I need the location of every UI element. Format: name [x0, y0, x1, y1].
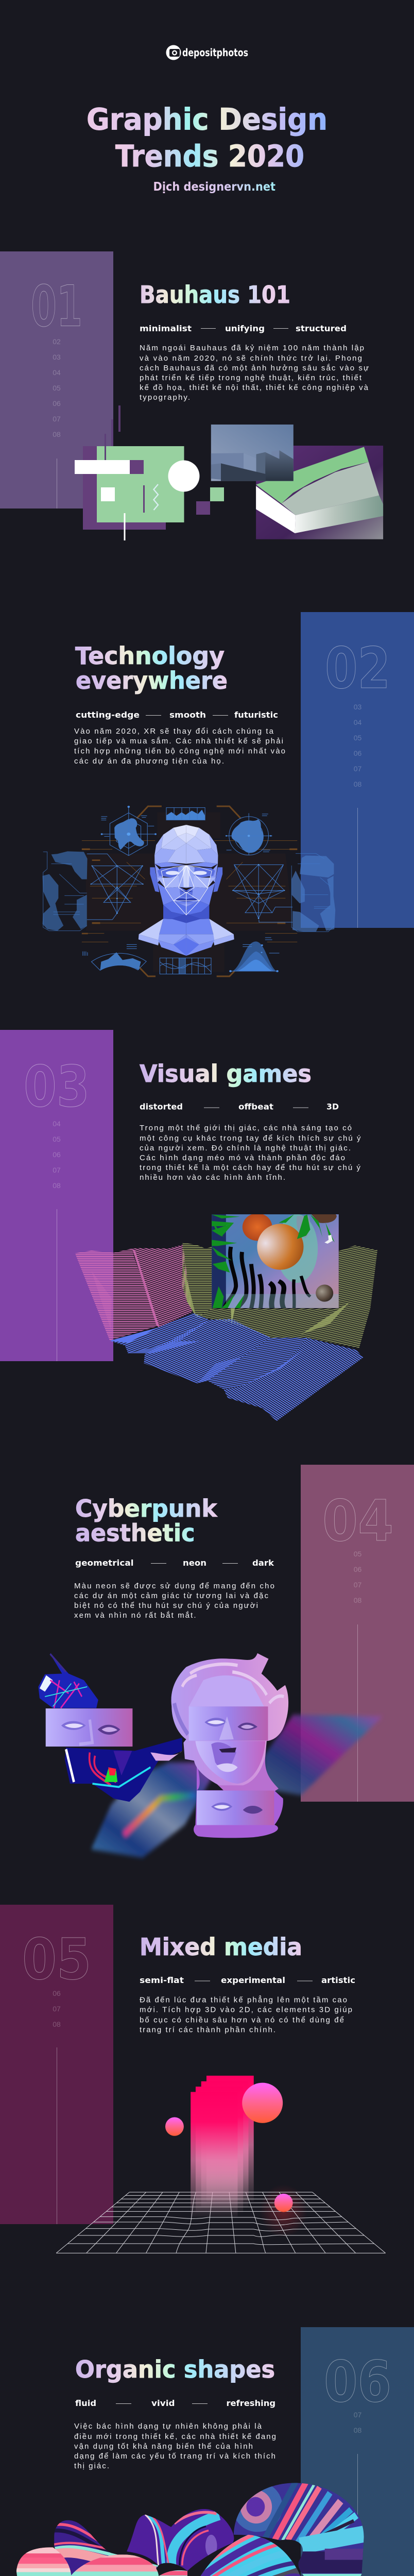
section 03 body text: nhiều hơn vào các hình ảnh tĩnh.	[140, 1173, 285, 1182]
HUD backdrop	[82, 806, 297, 976]
chapter index list: 07	[354, 765, 361, 773]
section 05 heading: Mixed media	[140, 1933, 302, 1961]
section 05 body text: Đã đến lúc đưa thiết kế phẳng lên một tầm cao	[140, 1995, 347, 2004]
illustration: organic striped blob	[16, 2483, 364, 2576]
section 06 body text: điều mới trong thiết kế, các nhà thiết kế đang	[74, 2432, 276, 2441]
HUD wire networks	[87, 854, 292, 922]
section number 04: 04	[322, 1488, 393, 1554]
eye slice lower	[197, 1791, 274, 1825]
chapter index list: 07	[53, 1166, 61, 1174]
section 06 body text: vận dụng tốt khả năng biến thể của hình	[74, 2442, 253, 2451]
chapter index list: 04	[354, 718, 361, 726]
chapter index list	[53, 1989, 61, 2028]
section 06 keywords	[75, 2398, 275, 2408]
section 03 heading: Visual games	[140, 1060, 312, 1088]
HUD hexagon with blob	[101, 806, 157, 856]
section 01 body text: cách Bauhaus đã có một ảnh hưởng sâu sắc vào sự	[140, 364, 369, 372]
HUD area chart top	[166, 808, 205, 820]
HUD bottom bell chart	[229, 938, 279, 972]
section 04 keywords: neon	[183, 1558, 206, 1568]
chapter index list: 04	[53, 1120, 61, 1128]
illustration: low-poly head with HUD	[43, 806, 335, 976]
chapter index list: 08	[53, 2020, 61, 2028]
icon: depositphotos camera logo	[166, 45, 181, 60]
panel: section 05 sidebar	[0, 1905, 113, 2224]
section 05 keywords: semi-flat	[140, 1975, 184, 1985]
section 01 heading: Bauhaus 101	[140, 281, 290, 309]
chapter index list: 06	[354, 749, 361, 757]
section 06 body text: Việc bác hình dạng tự nhiên không phải là	[74, 2422, 262, 2431]
section 01 body text: kế đồ họa, thiết kế nội thất, thiết kế công nghiệp và	[140, 383, 369, 392]
section number 02: 02	[325, 635, 390, 701]
section number 05: 05	[22, 1926, 91, 1992]
HUD right panel blobs	[291, 856, 335, 931]
HUD bottom-left arc chart	[83, 944, 146, 970]
section 02 body text: Vào năm 2020, XR sẽ thay đổi cách chúng ta	[74, 727, 274, 736]
section 02 body text: giao tiếp và mua sắm. Các nhà thiết kế sẽ phải	[74, 737, 283, 745]
title: Trends 2020	[115, 139, 304, 174]
blob: right loop tube	[232, 2482, 367, 2576]
section 02 keywords	[76, 710, 278, 720]
section 01 keywords: minimalist	[140, 324, 192, 333]
section 06 body text	[74, 2422, 276, 2470]
face mesh wireframe	[161, 866, 212, 915]
illustration: bauhaus composition	[75, 405, 383, 540]
chapter index list: 06	[354, 1565, 361, 1573]
section 03 keywords	[140, 1101, 339, 1112]
photo: collage of planets and zebra stripes	[212, 1213, 339, 1310]
chapter index list: 06	[53, 399, 61, 408]
head figure	[139, 825, 234, 956]
section 01 body text	[140, 344, 369, 402]
section 04 keywords	[75, 1558, 274, 1568]
subtitle credit: Dịch designervn.net	[153, 180, 275, 194]
chapter index list	[354, 2411, 361, 2434]
section 02 body text: tích hợp những tiến bộ công nghệ mới nhất vào	[74, 747, 285, 755]
chapter index list: 05	[354, 734, 361, 742]
section 01 keywords	[140, 324, 347, 333]
section 05 body text: mới. Tích hợp 3D vào 2D, các elements 3D giúp	[140, 2005, 352, 2014]
section 01 body text: phát triển kế tiếp trong nghệ thuật, kiến trúc, thiết	[140, 374, 362, 382]
section 04 keywords: geometrical	[75, 1558, 134, 1568]
section 06 body text: thị giác.	[74, 2462, 109, 2470]
sphere small	[165, 2117, 184, 2136]
section 05 body text: bố cục có chiều sâu hơn và nó có thể dùng để	[140, 2015, 344, 2025]
section 06 keywords: fluid	[75, 2398, 96, 2408]
chapter index list	[354, 703, 361, 788]
section 04 body text: Màu neon sẽ được sử dụng để mang đến cho	[74, 1582, 274, 1590]
blob: left pink striped lobe	[16, 2547, 71, 2576]
sphere large	[242, 2083, 283, 2123]
section 03 body text: một công cụ khác trong tay để kích thích sự chú ý	[140, 1134, 361, 1143]
chapter index list: 03	[53, 353, 61, 361]
section 05 keywords: artistic	[321, 1975, 355, 1985]
eye slice left	[46, 1708, 132, 1747]
title: Graphic Design	[87, 102, 327, 137]
mesh: green wall	[182, 1243, 377, 1348]
section 02 keywords: futuristic	[234, 710, 278, 720]
chapter index list: 03	[354, 703, 361, 711]
chapter index list	[354, 1550, 361, 1604]
section 02 body text	[74, 727, 285, 766]
chapter index list: 04	[53, 368, 61, 377]
section 02 body text: các dự án đa phương tiện của họ.	[74, 757, 224, 766]
HUD radar with blob	[226, 813, 272, 855]
chapter index list: 05	[53, 1135, 61, 1143]
panel: section 04 sidebar	[301, 1465, 414, 1802]
section 03 body text: của người xem. Đó chính là nghệ thuật thị giác.	[140, 1144, 351, 1153]
chapter index list: 08	[354, 780, 361, 788]
section 02 heading	[75, 642, 228, 694]
chapter index list: 08	[354, 1596, 361, 1604]
section 03 body text: Các hình dạng méo mó và thành phần độc đáo	[140, 1154, 345, 1162]
mesh: blue floor	[110, 1313, 363, 1421]
section 03 body text	[140, 1124, 361, 1182]
blob: mid pale lobe	[159, 2570, 187, 2576]
sculpture base and neck	[194, 1756, 283, 1838]
section 04 body text: biệt nó có thể thu hút sự chú ý của người	[74, 1601, 258, 1610]
HUD left panel wires	[43, 852, 87, 931]
section 01 body text: Năm ngoái Bauhaus đã kỷ niệm 100 năm thành lập	[140, 344, 364, 352]
panel: section 06 sidebar	[301, 2327, 414, 2576]
section 06 keywords: refreshing	[227, 2398, 275, 2408]
sculpture head	[171, 1653, 288, 1785]
section 04 heading	[75, 1495, 218, 1547]
chapter index list: 07	[354, 1581, 361, 1589]
chapter index list: 06	[53, 1989, 61, 1997]
section 06 body text: dạng để làm các yếu tố trang trí và kích thích	[74, 2452, 275, 2461]
blob: large pale lobe	[71, 2554, 159, 2576]
chapter index list: 07	[53, 2005, 61, 2013]
stacked pink bars	[191, 2076, 254, 2217]
chapter index list	[53, 1120, 61, 1190]
blob: top purple swirl	[127, 2509, 234, 2571]
section 03 keywords: distorted	[140, 1101, 183, 1112]
section 01 keywords: unifying	[225, 324, 265, 333]
mesh: pink wall	[75, 1245, 192, 1341]
section 02 heading: Technology	[75, 642, 225, 670]
chapter index list	[53, 337, 61, 438]
illustration: striped wave mesh	[75, 1213, 377, 1421]
logo wordmark: depositphotos	[182, 46, 248, 59]
section 06 keywords: vivid	[151, 2398, 175, 2408]
section 02 keywords: cutting-edge	[76, 710, 140, 720]
section 03 body text: Trong một thế giới thị giác, các nhà sáng tạo có	[140, 1124, 352, 1132]
section number 06: 06	[324, 2349, 391, 2415]
section 04 body text: các dự án một cảm giác từ tương lai và đặc	[74, 1591, 269, 1600]
section 06 heading: Organic shapes	[75, 2355, 275, 2383]
section 01 keywords: structured	[296, 324, 347, 333]
chapter index list: 07	[354, 2411, 361, 2419]
section 01 body text: và vào năm 2020, nó sẽ chính thức trở lại. Phong	[140, 354, 362, 363]
HUD right panel wires	[291, 854, 334, 931]
HUD left panel blobs	[43, 851, 88, 931]
HUD bottom grid chart	[160, 958, 211, 974]
section 05 keywords: experimental	[221, 1975, 285, 1985]
chapter index list: 07	[53, 415, 61, 423]
section 02 keywords: smooth	[169, 710, 206, 720]
section number 01: 01	[31, 273, 82, 339]
illustration: 3D pink bars over grid	[56, 2076, 386, 2253]
section 04 body text: xem và nhìn nó rất bắt mắt.	[74, 1611, 196, 1620]
photo: blue building against sky	[211, 425, 294, 481]
illustration: cyberpunk sculpture	[38, 1653, 383, 1858]
section number 03: 03	[24, 1054, 90, 1120]
section 05 body text: trang trí các thành phần chính.	[140, 2026, 275, 2034]
header	[87, 45, 327, 194]
glow under ball	[260, 2184, 307, 2238]
section 04 heading: aesthetic	[75, 1519, 195, 1547]
chapter index list: 08	[354, 2426, 361, 2434]
chapter index list: 06	[53, 1150, 61, 1159]
panel: section 02 sidebar	[301, 612, 414, 928]
section 03 keywords: offbeat	[238, 1101, 273, 1112]
chapter index list: 02	[53, 337, 61, 346]
section 01 body text: typography.	[140, 393, 190, 402]
panel: section 01 sidebar	[0, 251, 113, 509]
sphere on grid	[274, 2194, 293, 2212]
blurred holographic streak	[91, 1715, 383, 1858]
section 03 body text: trong thiết kế là một cách hay để thu hút sự chú ý	[140, 1163, 360, 1172]
panel: section 03 sidebar	[0, 1030, 113, 1361]
section 05 body text	[140, 1995, 352, 2034]
blob: centre striped lobe	[201, 2535, 301, 2576]
section 04 body text	[74, 1582, 274, 1620]
eye slice on head	[189, 1706, 268, 1741]
title	[87, 102, 327, 174]
wire grid floor	[56, 2192, 386, 2253]
chapter index list: 08	[53, 1181, 61, 1190]
chapter index list: 05	[53, 384, 61, 392]
chapter index list: 08	[53, 430, 61, 438]
section 04 keywords: dark	[252, 1558, 274, 1568]
section 05 keywords	[140, 1975, 355, 1985]
holographic fragment upper left	[38, 1654, 98, 1708]
section 03 keywords: 3D	[326, 1101, 339, 1112]
blob: upper-left striped lobe	[54, 2520, 159, 2575]
holographic fragment lower	[65, 1738, 182, 1802]
section 04 heading: Cyberpunk	[75, 1495, 218, 1522]
photo: green and purple architecture	[256, 446, 383, 539]
chapter index list: 05	[354, 1550, 361, 1558]
section 02 heading: everywhere	[76, 667, 228, 694]
